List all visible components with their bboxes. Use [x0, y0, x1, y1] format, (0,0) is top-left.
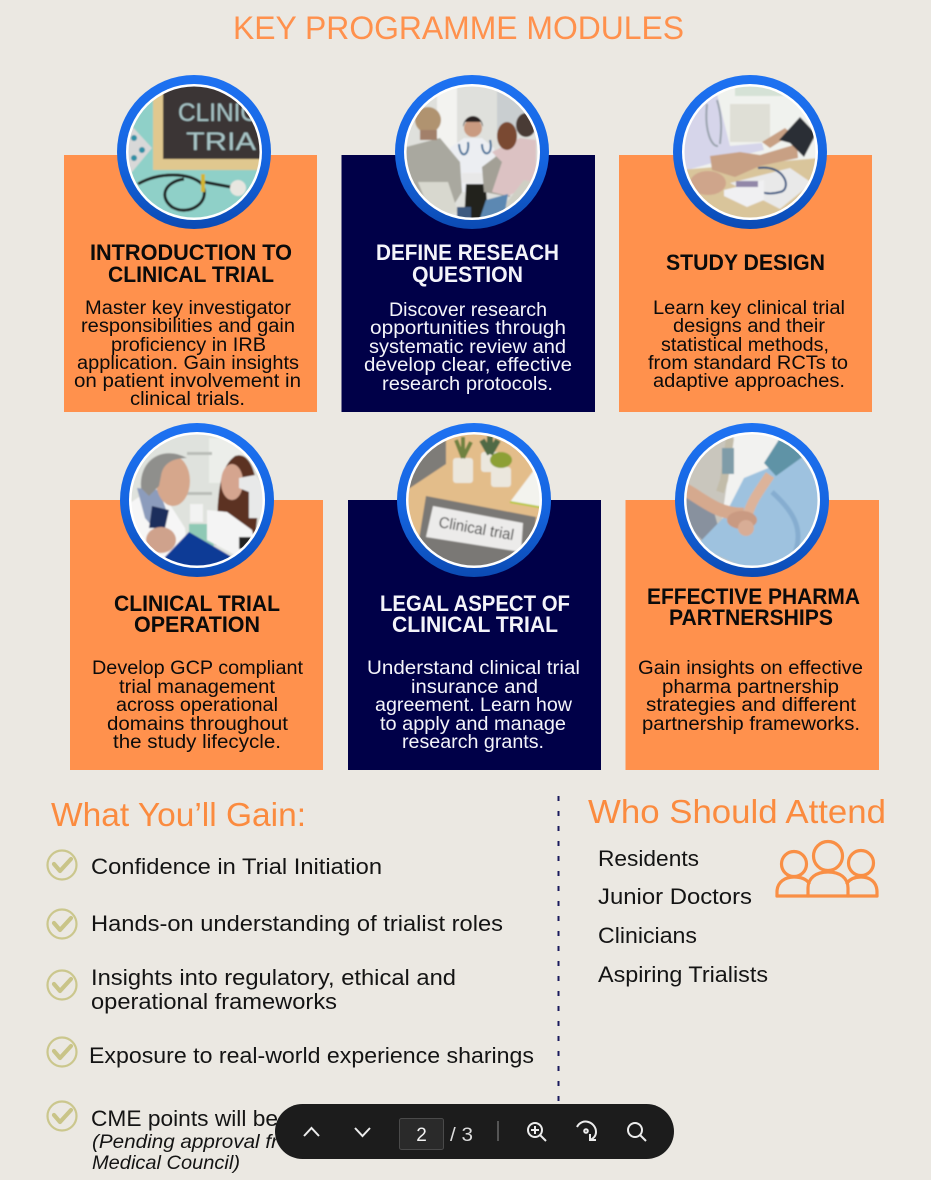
heading: EFFECTIVE PHARMA: [647, 584, 860, 609]
page number input: 2: [416, 1125, 427, 1146]
body text: clinical trials.: [130, 389, 245, 410]
photo: clinical trial chalkboard and stethoscope: TRIA: [186, 128, 256, 156]
panel: legal aspect of clinical trial: [348, 423, 601, 770]
body text: systematic review and: [369, 337, 566, 358]
body text: [74, 298, 301, 410]
page total: / 3: [450, 1125, 473, 1146]
body text: Develop GCP compliant: [92, 658, 304, 679]
body text: Gain insights on effective: [638, 658, 863, 679]
list item: CME points: CME points will be: [91, 1106, 278, 1131]
photo: doctor meeting with people: [395, 75, 549, 229]
heading: LEGAL ASPECT OF: [380, 591, 570, 616]
body text: [364, 300, 572, 395]
list item: confidence: [48, 850, 382, 880]
body text: pharma partnership: [662, 677, 839, 698]
panel: introduction to clinical trial: [64, 75, 317, 412]
list item: insights: Insights into regulatory, ethical and: [91, 965, 456, 990]
heading: [114, 591, 280, 637]
page number input: [400, 1118, 444, 1150]
icon: group of people: [777, 842, 877, 896]
body text: on patient involvement in: [74, 371, 301, 392]
heading: [90, 240, 292, 287]
body text: research grants.: [402, 732, 544, 753]
icon: next page: [355, 1128, 370, 1136]
icon: previous page: [304, 1128, 319, 1136]
list item: confidence: Confidence in Trial Initiation: [91, 854, 382, 879]
icon: zoom in: [528, 1123, 546, 1141]
body text: across operational: [116, 695, 278, 716]
body text: the study lifecycle.: [113, 732, 281, 753]
body text: to apply and manage: [380, 714, 566, 735]
panel: study design: [619, 75, 872, 412]
body text: partnership frameworks.: [642, 714, 860, 735]
photo: clinical trial chalkboard and stethoscope: CLINIC: [178, 99, 258, 127]
title: KEY PROGRAMME MODULES: [233, 10, 684, 46]
body text: proficiency in IRB: [111, 335, 266, 356]
heading: [376, 240, 559, 287]
panel: who should attend: [588, 793, 886, 987]
audience list: [598, 846, 768, 987]
list item: hands-on: Hands-on understanding of trialist roles: [91, 911, 503, 936]
photo: clinical trial folder on desk: [397, 423, 551, 577]
body text: adaptive approaches.: [653, 371, 845, 392]
icon: search: [628, 1123, 646, 1141]
list item: exposure: Exposure to real-world experience sharings: [89, 1043, 534, 1068]
audience list: Aspiring Trialists: [598, 962, 768, 987]
body text: [92, 658, 304, 753]
photo: researchers in laboratory: [120, 423, 274, 577]
body text: Discover research: [389, 300, 547, 321]
body text: application. Gain insights: [77, 353, 299, 374]
heading: INTRODUCTION TO: [90, 240, 292, 265]
panel: effective pharma partnerships: [626, 423, 879, 770]
body text: develop clear, effective: [364, 355, 572, 376]
list item: insights: [48, 965, 456, 1014]
panel: define research question: [342, 75, 595, 412]
list item: CME points: Medical Council): [92, 1153, 240, 1174]
heading: [647, 584, 860, 630]
body text: opportunities through: [370, 318, 566, 339]
body text: [638, 658, 863, 735]
heading: CLINICAL TRIAL: [392, 612, 558, 637]
list item: CME points: (Pending approval fr: [92, 1132, 279, 1153]
body text: responsibilities and gain: [81, 316, 295, 337]
audience list: Junior Doctors: [598, 884, 752, 909]
heading: CLINICAL TRIAL: [114, 591, 280, 616]
heading: DEFINE RESEACH: [376, 240, 559, 265]
icon: rotate: [577, 1122, 596, 1140]
body text: insurance and: [411, 677, 538, 698]
heading: [380, 591, 570, 637]
heading: STUDY DESIGN: [666, 250, 825, 275]
toolbar: pdf viewer controls: [275, 1104, 674, 1159]
photo: holding hands at hospital bed: [675, 423, 829, 577]
audience list: Residents: [598, 846, 699, 871]
body text: [648, 298, 848, 392]
heading: CLINICAL TRIAL: [108, 262, 274, 287]
body text: agreement. Learn how: [375, 695, 572, 716]
heading: PARTNERSHIPS: [669, 605, 833, 630]
body text: Learn key clinical trial: [653, 298, 845, 319]
body text: statistical methods,: [661, 335, 829, 356]
heading: What You’ll Gain:: [51, 796, 306, 833]
body text: trial management: [119, 677, 276, 698]
panel: what you'll gain: [48, 796, 534, 1174]
body text: [367, 658, 580, 753]
body text: domains throughout: [107, 714, 289, 735]
panel: clinical trial operation: [70, 423, 323, 770]
body text: Master key investigator: [85, 298, 292, 319]
heading: Who Should Attend: [588, 793, 886, 830]
body text: strategies and different: [646, 695, 857, 716]
body text: research protocols.: [382, 374, 553, 395]
audience list: Clinicians: [598, 923, 697, 948]
photo: clinical trial folder on desk: Clinical trial: [437, 514, 515, 544]
heading: QUESTION: [412, 262, 523, 287]
heading: OPERATION: [134, 612, 260, 637]
list item: CME points: [48, 1102, 279, 1174]
body text: from standard RCTs to: [648, 353, 848, 374]
body text: Understand clinical trial: [367, 658, 580, 679]
photo: clinical trial chalkboard and stethoscope: [117, 75, 271, 229]
body text: designs and their: [673, 316, 826, 337]
list item: insights: operational frameworks: [91, 989, 337, 1014]
photo: blood pressure measurement: [673, 75, 827, 229]
